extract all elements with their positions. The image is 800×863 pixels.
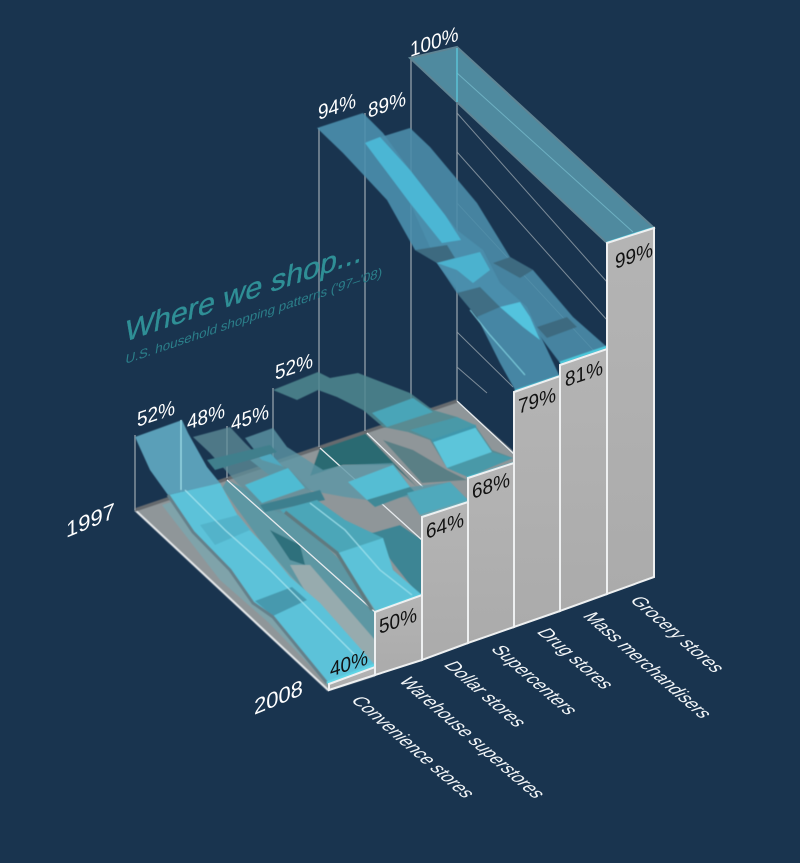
subtitle: U.S. household shopping patterns ('97–'08) [125, 264, 383, 367]
ribbon: drug stores 94% to 79% [317, 113, 560, 391]
front bars at 2008 [329, 228, 654, 690]
store category labels: Grocery stores [625, 594, 731, 675]
1997 values: 52% [275, 349, 313, 385]
grid lines on back wall [227, 113, 607, 612]
2008 values: 64% [426, 508, 464, 544]
2008 values: 99% [615, 238, 653, 274]
2008 values: 40% [330, 646, 368, 682]
ribbon: supercenters 52% to 68% [273, 372, 515, 478]
ribbon: dollar stores 45% to 64% [245, 428, 468, 517]
chart floor [135, 401, 654, 690]
2008 values [330, 238, 653, 682]
year labels: 2008 [254, 674, 303, 720]
2008 values: 68% [472, 468, 510, 504]
2008 values: 81% [565, 356, 603, 392]
store category labels: Convenience stores [346, 694, 481, 800]
store category labels [346, 594, 731, 800]
vertical axis posts at 1997 [135, 47, 457, 510]
store category labels: Mass merchandisers [578, 610, 718, 720]
1997 values: 52% [137, 396, 175, 432]
1997 values: 89% [368, 87, 406, 123]
title: Where we shop... [123, 233, 365, 349]
ribbon: grocery stores 100% to 99% [410, 47, 654, 243]
store category labels: Dollar stores [439, 659, 533, 729]
store category labels: Supercenters [486, 643, 584, 717]
2008 values: 79% [518, 383, 556, 419]
1997 values [137, 22, 459, 436]
1997 values: 45% [231, 400, 269, 436]
ribbon: mass merchandisers 89% to 81% [365, 128, 607, 363]
ribbon: warehouse superstores 48% to 50% [193, 427, 422, 612]
1997 values: 94% [318, 89, 356, 125]
1997 values: 48% [187, 399, 225, 435]
ribbon: convenience stores 52% to 40% [135, 420, 375, 683]
store category labels: Warehouse superstores [394, 675, 552, 800]
2008 values: 50% [379, 603, 417, 639]
year labels [66, 497, 303, 720]
1997 values: 100% [410, 22, 459, 62]
store category labels: Drug stores [532, 626, 620, 691]
year labels: 1997 [66, 497, 115, 543]
